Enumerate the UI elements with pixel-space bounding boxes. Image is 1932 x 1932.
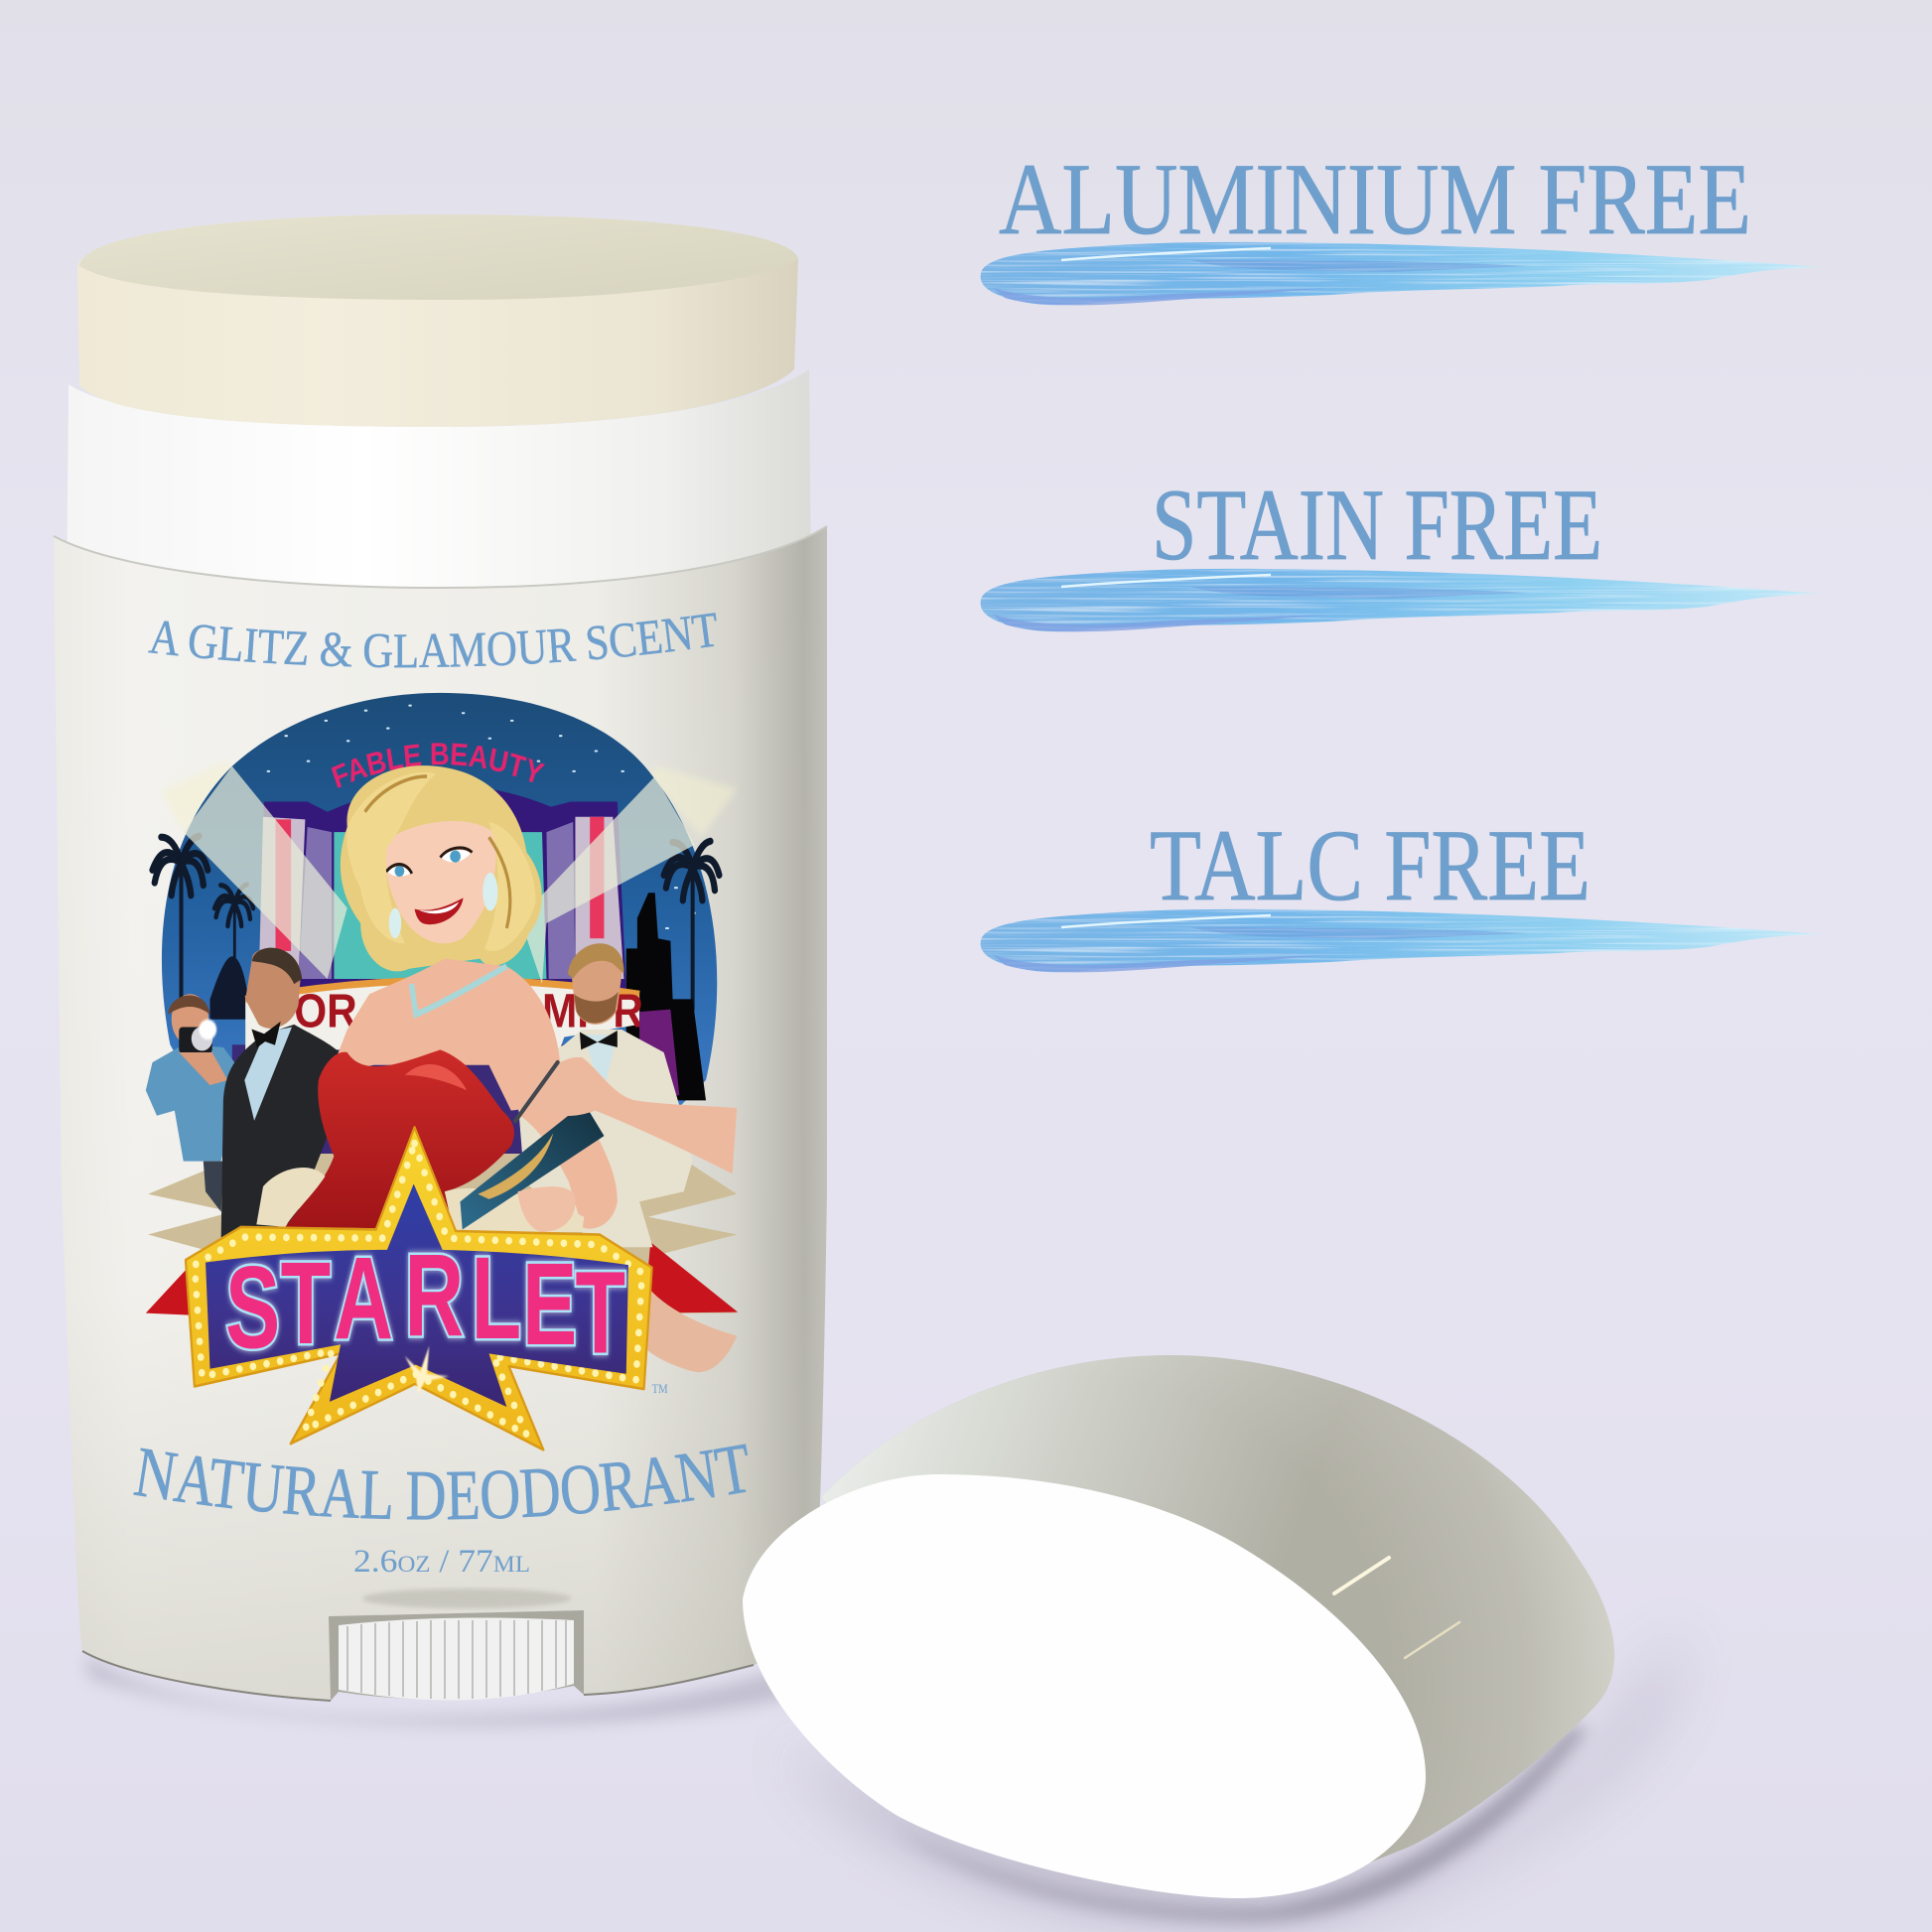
heading: aluminium free (981, 143, 1821, 305)
starlet logo (186, 1127, 652, 1449)
spotlight glow beyond circle (161, 761, 737, 837)
movie theatre: MI (542, 984, 589, 1037)
label text: size: 2.6oz / 77ml (353, 1544, 530, 1580)
heading: stain free (981, 469, 1821, 631)
palm trees (153, 836, 719, 1100)
shoulders and chest (330, 959, 560, 1111)
arm with fur stole (520, 1049, 618, 1229)
cap white face (743, 1474, 1426, 1898)
logo blue panel (206, 1184, 628, 1407)
movie theatre (232, 785, 679, 1167)
marquee sign (245, 980, 639, 1049)
man in white tuxedo (515, 943, 693, 1247)
autograph photo card (460, 1103, 604, 1229)
leg (641, 1288, 737, 1372)
heading: stain free: STAIN FREE (1152, 469, 1602, 582)
brush stroke 3 (981, 909, 1821, 972)
theatre lower wall (232, 1044, 657, 1167)
label text: scent: A GLITZ & GLAMOUR SCENT (148, 613, 717, 667)
checker floor (148, 1154, 737, 1313)
cap lying on floor (743, 1355, 1678, 1921)
hand holding card (517, 1186, 576, 1232)
trademark: TM (652, 1384, 668, 1396)
night sky circle (162, 693, 717, 1156)
spotlight beams (184, 766, 695, 984)
cap shadow (784, 1628, 1678, 1916)
cap side wall (821, 1355, 1614, 1881)
brush stroke 1 (981, 242, 1821, 305)
logo marquee bulbs (195, 1144, 642, 1435)
autograph arm and pen (515, 1057, 737, 1173)
necklace (411, 966, 506, 1015)
movie theatre: OR (294, 984, 357, 1037)
starlet neon wordmark: STARLET (225, 1230, 625, 1378)
cream deodorant stick (77, 214, 798, 427)
main body tube (54, 526, 827, 1701)
brush stroke 2 (981, 569, 1821, 631)
hair back (341, 765, 542, 971)
logo sparkle (405, 1346, 449, 1394)
label illustration (145, 693, 738, 1451)
starlet woman (256, 765, 737, 1232)
heading: talc free: TALC FREE (1150, 809, 1590, 922)
white inner sleeve (67, 369, 811, 596)
smile (415, 897, 464, 924)
twist dial (329, 1610, 584, 1701)
man in black tuxedo (221, 948, 347, 1240)
eyes (387, 850, 471, 877)
label text: natural deodorant: NATURAL DEODORANT (133, 1444, 748, 1520)
cap highlights (1334, 1558, 1459, 1658)
red dress (285, 1049, 514, 1229)
fable beauty sign: FABLE BEAUTY (332, 743, 545, 788)
face (384, 821, 496, 943)
hair front curls (346, 772, 436, 943)
photographer (146, 994, 236, 1212)
earrings (483, 873, 497, 911)
deodorant stick container (54, 214, 828, 1730)
stars (267, 706, 695, 928)
heading: aluminium free: ALUMINIUM FREE (999, 143, 1751, 256)
heading: talc free (981, 809, 1821, 972)
stick top face (79, 214, 798, 300)
movie theatre: R (613, 984, 643, 1037)
floor shadow under container (84, 1648, 824, 1725)
